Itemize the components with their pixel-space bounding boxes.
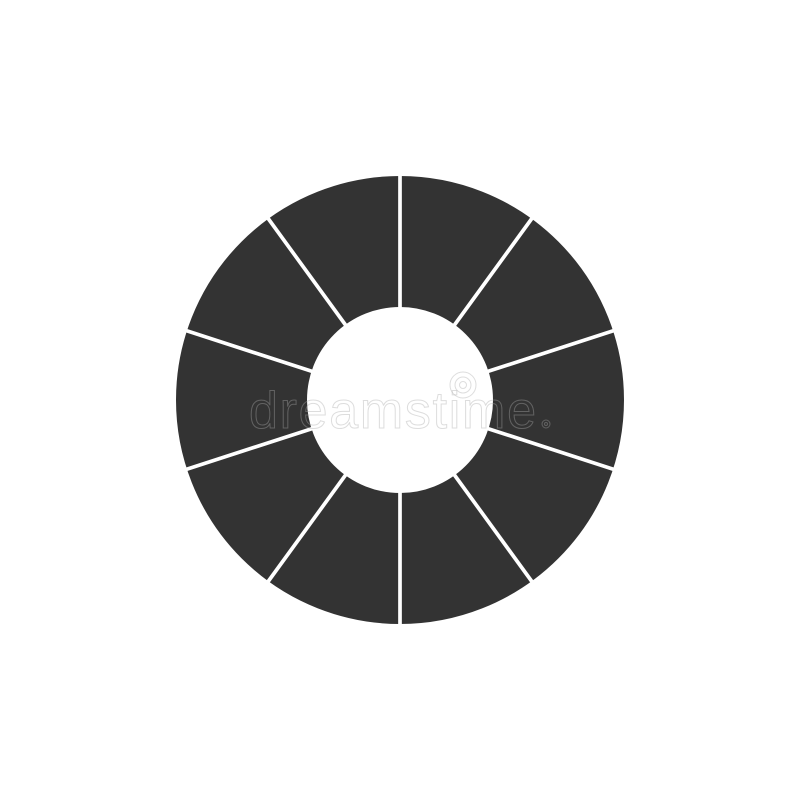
watermark logo <box>450 372 476 398</box>
donut ring <box>242 242 558 558</box>
watermark registered mark <box>542 420 550 428</box>
watermark text: dreamstime <box>249 382 536 440</box>
watermark <box>249 372 550 440</box>
segment dividers <box>181 170 619 630</box>
